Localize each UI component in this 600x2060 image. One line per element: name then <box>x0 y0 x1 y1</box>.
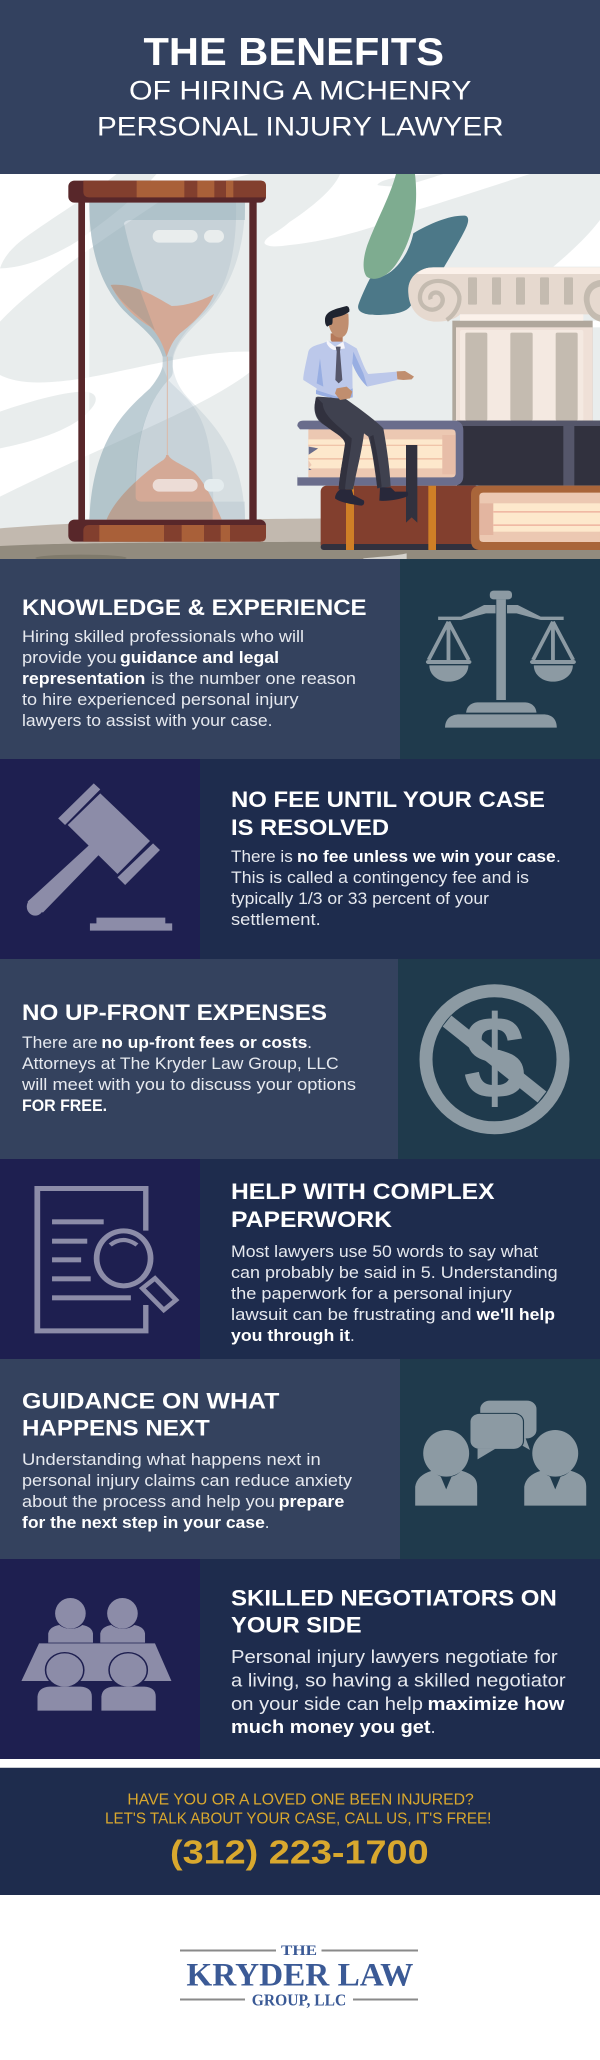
man in shirt and tie <box>303 306 414 506</box>
body text: guidance and legal <box>120 648 279 667</box>
body text: personal injury claims can reduce anxiety <box>22 1471 353 1490</box>
logo: The Kryder Law Group, LLC: KRYDER LAW <box>186 1958 413 1994</box>
panel: skilled negotiators <box>0 1559 600 1759</box>
heading: NO UP-FRONT EXPENSES <box>22 1000 327 1025</box>
panel: complex paperwork <box>0 1159 600 1359</box>
body text: There is <box>231 847 293 866</box>
panel: knowledge and experience <box>0 559 600 759</box>
stacked books <box>297 421 600 550</box>
body text: on your side can help <box>231 1693 423 1714</box>
icon: people at a negotiating table <box>21 1598 171 1711</box>
icon: no dollar sign <box>426 991 563 1128</box>
body text <box>22 627 356 730</box>
glass highlights <box>153 230 224 492</box>
call to action text: LET'S TALK ABOUT YOUR CASE, CALL US, IT'S FREE! <box>105 1810 491 1827</box>
call to action text <box>105 1791 491 1827</box>
heading <box>22 1389 280 1441</box>
body text: This is called a contingency fee and is <box>231 868 529 887</box>
body text: typically 1/3 or 33 percent of your <box>231 889 489 908</box>
body text <box>231 847 561 929</box>
call to action banner <box>0 1767 600 1895</box>
body text: representation <box>22 669 145 688</box>
heading: IS RESOLVED <box>231 815 389 840</box>
body text: There are <box>22 1033 98 1052</box>
hourglass <box>68 181 266 542</box>
body text: much money you get <box>231 1716 430 1737</box>
title: PERSONAL INJURY LAWYER <box>97 112 504 142</box>
body text: lawsuit can be frustrating and <box>231 1305 472 1324</box>
body text: settlement. <box>231 910 321 929</box>
heading: GUIDANCE ON WHAT <box>22 1389 280 1414</box>
panel: no fee until resolved <box>0 759 600 959</box>
header banner <box>0 0 600 174</box>
body text: Most lawyers use 50 words to say what <box>231 1242 538 1261</box>
heading <box>231 1179 494 1232</box>
body text: Personal injury lawyers negotiate for <box>231 1646 558 1667</box>
logo: The Kryder Law Group, LLC: GROUP, LLC <box>252 1990 346 2009</box>
hero illustration <box>0 174 600 561</box>
logo: The Kryder Law Group, LLC <box>180 1943 418 2009</box>
body text: we'll help <box>475 1305 555 1324</box>
body text: . <box>307 1033 312 1052</box>
body text: maximize how <box>428 1693 565 1714</box>
body text: lawyers to assist with your case. <box>22 711 272 730</box>
body text <box>22 1450 353 1532</box>
icon: no dollar sign: $ <box>464 992 526 1124</box>
body text: you through it <box>231 1326 350 1345</box>
body text: . <box>430 1716 436 1737</box>
leaves, column, books and man <box>297 174 600 550</box>
heading <box>231 787 545 840</box>
body text: no up-front fees or costs <box>101 1033 307 1052</box>
body text: . <box>265 1513 270 1532</box>
body text: no fee unless we win your case <box>297 847 556 866</box>
heading: SKILLED NEGOTIATORS ON <box>231 1586 557 1611</box>
body text: is the number one reason <box>151 669 356 688</box>
body text: will meet with you to discuss your options <box>21 1075 356 1094</box>
body text: can probably be said in 5. Understanding <box>231 1263 558 1282</box>
body text <box>21 1033 356 1115</box>
heading: NO FEE UNTIL YOUR CASE <box>231 787 545 812</box>
bottom cap <box>68 520 266 542</box>
heading: HELP WITH COMPLEX <box>231 1179 494 1204</box>
icon: gavel <box>27 783 172 931</box>
frame posts <box>78 200 257 523</box>
sand <box>107 285 222 519</box>
body text: . <box>556 847 561 866</box>
body text: for the next step in your case <box>22 1513 265 1532</box>
body text: provide you <box>22 648 117 667</box>
column <box>408 267 600 421</box>
body text: a living, so having a skilled negotiator <box>231 1670 566 1691</box>
body text: prepare <box>279 1492 344 1511</box>
heading: PAPERWORK <box>231 1207 393 1232</box>
body text: the paperwork for a personal injury <box>231 1284 512 1303</box>
icon: scales of justice <box>426 591 576 728</box>
phone number: (312) 223-1700 <box>170 1833 429 1870</box>
heading: KNOWLEDGE & EXPERIENCE <box>22 595 367 620</box>
body text: Hiring skilled professionals who will <box>22 627 304 646</box>
body text: Attorneys at The Kryder Law Group, LLC <box>22 1054 339 1073</box>
title: OF HIRING A MCHENRY <box>129 76 472 106</box>
body text: about the process and help you <box>22 1492 275 1511</box>
ground <box>0 517 600 561</box>
body text <box>231 1242 558 1345</box>
title <box>97 31 504 142</box>
panel: no up-front expenses <box>0 959 600 1159</box>
icon: document with magnifying glass <box>34 1186 176 1333</box>
body text <box>231 1646 566 1737</box>
icon: two people talking <box>415 1401 586 1506</box>
call to action text: HAVE YOU OR A LOVED ONE BEEN INJURED? <box>127 1791 474 1808</box>
body text: Understanding what happens next in <box>22 1450 321 1469</box>
top cap <box>68 181 266 203</box>
logo: The Kryder Law Group, LLC: THE <box>281 1943 317 1959</box>
body text: . <box>350 1326 355 1345</box>
title: THE BENEFITS <box>144 31 444 74</box>
heading: YOUR SIDE <box>231 1613 362 1638</box>
body text: FOR FREE. <box>22 1096 107 1115</box>
illustration background <box>0 174 600 559</box>
leaves <box>358 174 468 315</box>
body text: to hire experienced personal injury <box>22 690 299 709</box>
panel: guidance on what happens next <box>0 1359 600 1559</box>
heading <box>231 1586 557 1638</box>
heading: HAPPENS NEXT <box>22 1416 210 1441</box>
